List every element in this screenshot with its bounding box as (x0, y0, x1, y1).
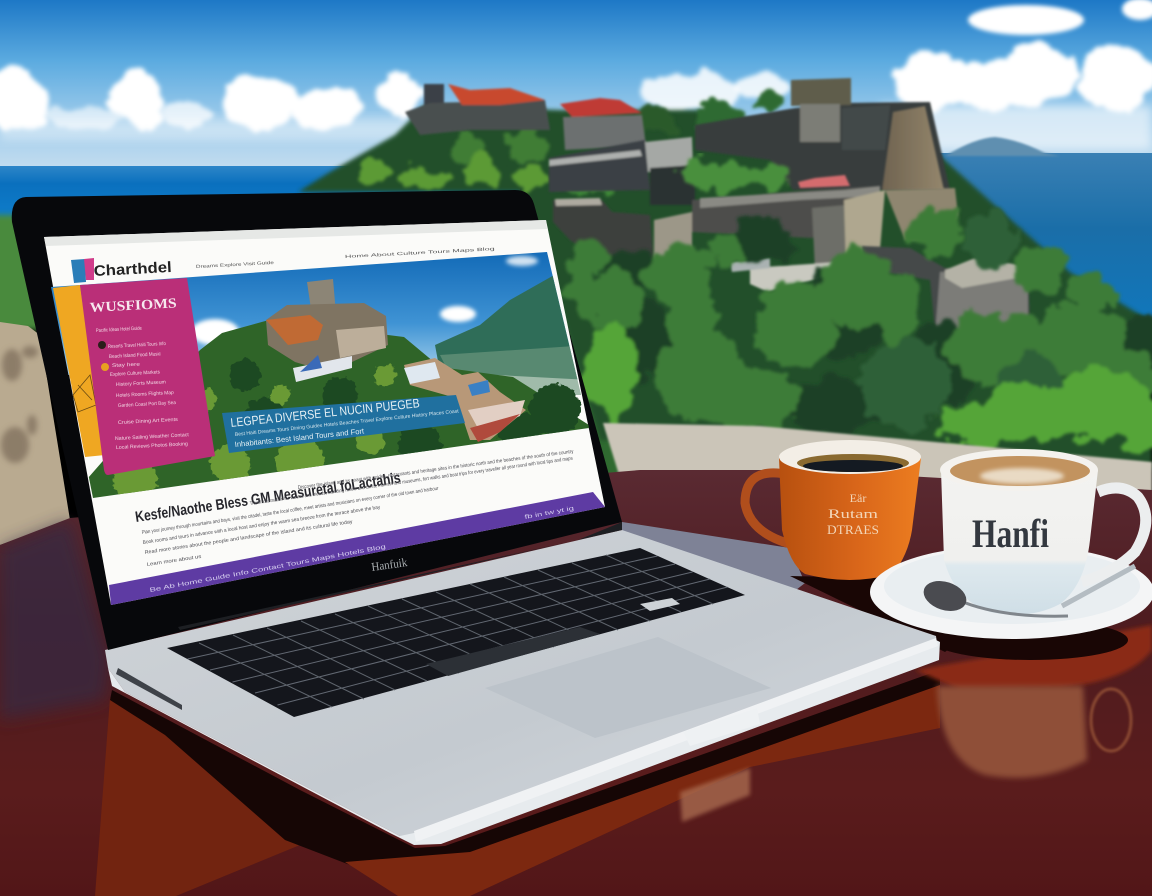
purple footer: Be Ab Home Guide Info Contact Tours Maps Hotels Blog (149, 544, 386, 594)
sky (0, 0, 1152, 175)
stone wall at left (0, 322, 70, 545)
mug rim (779, 440, 921, 474)
table top (0, 470, 1152, 896)
reflection: dim left (0, 520, 110, 720)
fort: tan tower (882, 106, 944, 190)
pink panel: WUSFIOMS (89, 296, 177, 316)
hero tower and fort (307, 279, 336, 304)
laptop base (105, 530, 940, 845)
white cup (940, 449, 1146, 615)
pink panel: Stay here (112, 362, 140, 369)
lid brand: Hanfuik (370, 555, 408, 574)
trees: blue-grey green (861, 212, 1064, 431)
fort: top-left buildings and roofs (405, 84, 646, 150)
saucer (870, 545, 1152, 639)
mug label: DTRAES (827, 522, 879, 537)
fort: red canopy (798, 175, 850, 188)
cup handle (1082, 488, 1146, 582)
hero mountain (435, 274, 590, 380)
top nav text: Dreams Explore Visit Guide (196, 260, 275, 269)
site logo: Charthdel (93, 259, 172, 280)
hero clouds (191, 256, 538, 345)
trees: dark (600, 218, 1152, 433)
trees: bright foreground (584, 324, 1152, 453)
left foliage (0, 215, 50, 330)
clouds (0, 0, 1152, 150)
article paragraph: Read more stories about the people and landscape of the island and its cultural life today (144, 519, 354, 556)
mug body (779, 458, 921, 580)
foreground trees (565, 206, 1152, 453)
reflection: mug (937, 686, 1087, 778)
article paragraph (141, 449, 574, 568)
latte (950, 456, 1090, 486)
article paragraph: Book rooms and tours in advance with a local host and enjoy the warm sea breeze from the terrace above the bay (142, 505, 381, 546)
sea right (900, 153, 1152, 343)
pink panel: Cruise Dining Art Events (118, 417, 179, 426)
hero hill forest (88, 320, 589, 498)
reflection: dark under laptop (110, 670, 940, 865)
reflection: red glow under saucer (915, 625, 1152, 690)
browser bar (44, 220, 547, 246)
screen page background (44, 220, 605, 605)
screen (40, 220, 605, 605)
side ports (116, 668, 182, 710)
sea left (0, 166, 520, 236)
hero right village (404, 358, 526, 440)
reflection: red lid front (345, 685, 940, 896)
space bar (426, 627, 600, 676)
sky reflection on the right of the laptop (622, 522, 805, 590)
foliage base behind laptop (400, 240, 700, 500)
laptop (12, 190, 940, 845)
article heading: Kesfe/Naothe Bless GM Measuretal foLactahis (134, 470, 402, 526)
reflection: notch (680, 768, 750, 822)
fort: main rampart (553, 186, 958, 292)
hill mass (298, 105, 1152, 470)
pink panel: Resorts Travel Haiti Tours Info (108, 341, 166, 350)
article paragraph: Learn more about us (146, 554, 202, 568)
article paragraph: Travel information for visitors and friends, including hotels and cafes, markets and museums, fort walks and boat trips for every traveller all year round with local tips and maps (249, 456, 574, 507)
cup rim (940, 449, 1098, 491)
pink panel: History Forts Museum (116, 379, 166, 388)
laptop lid (12, 190, 622, 650)
stone ledge (603, 423, 1152, 500)
spoon (920, 566, 1135, 616)
fort: right wall (860, 246, 1030, 347)
blue banner: Best Haiti Dreams Tours Dining Guides Hotels Beaches Travel Explore Culture History Places Coast (235, 408, 460, 438)
pink panel (80, 278, 215, 475)
distant island (945, 137, 1060, 156)
reflection: red lid left (95, 698, 300, 896)
pink panel: Garden Coast Port Bay Sea (118, 400, 176, 409)
fort: low walls (549, 137, 695, 205)
trees: mid green (565, 206, 1152, 432)
shadow under mug and saucer (790, 576, 1128, 660)
blue banner: Inhabitants: Best Island Tours and Fort (234, 426, 365, 449)
blue banner: LEGPEA DIVERSE EL NUCIN PUEGEB (230, 396, 420, 430)
purple footer: fb in tw yt ig (524, 506, 575, 521)
top nav text (196, 246, 496, 269)
coffee (797, 454, 909, 472)
table reflections (0, 520, 1152, 896)
pink panel: Pacific Ideas Hotel Guide (96, 326, 142, 334)
blue banner (222, 395, 465, 453)
orange mug (745, 440, 921, 580)
fort: green terrace (680, 157, 795, 193)
mug label: Eär (850, 491, 866, 505)
pink panel: Hotels Rooms Flights Map (116, 390, 174, 399)
pink panel: Explore Culture Markets (110, 369, 160, 378)
background hill foliage (298, 91, 1152, 470)
pink panel: Nature Sailing Weather Contact (115, 432, 190, 442)
article paragraph: Plan your journey through mountains and bays, visit the citadel, taste the local coffee, meet artists and musicians on every corner of the old town and harbour (141, 486, 439, 536)
cup body (941, 470, 1098, 615)
hilltop fort (405, 78, 1030, 347)
top nav text: Home About Culture Tours Maps Blog (345, 246, 496, 259)
yellow side panel (53, 285, 105, 457)
reflection: mug handle (1091, 689, 1131, 751)
hill top-left greens (357, 91, 786, 196)
purple footer (109, 492, 605, 605)
hero photo (51, 252, 589, 498)
mug label (827, 491, 879, 537)
pink panel: Beach Island Food Music (109, 351, 161, 360)
article paragraph: Discover the island and its coast with guides, restaurants and heritage sites in the historic north and the beaches of the south of the country (297, 449, 574, 491)
site logo (71, 258, 172, 283)
front notch (683, 708, 760, 746)
pink panel: Local Reviews Photos Booking (116, 441, 188, 451)
hero sky (51, 252, 576, 375)
cup label: Hanfi (972, 511, 1049, 556)
mug handle (745, 473, 798, 546)
fort: upper towers (695, 78, 950, 190)
keyboard (167, 548, 745, 717)
mug label: Rutam (828, 506, 878, 521)
trackpad (485, 637, 771, 738)
